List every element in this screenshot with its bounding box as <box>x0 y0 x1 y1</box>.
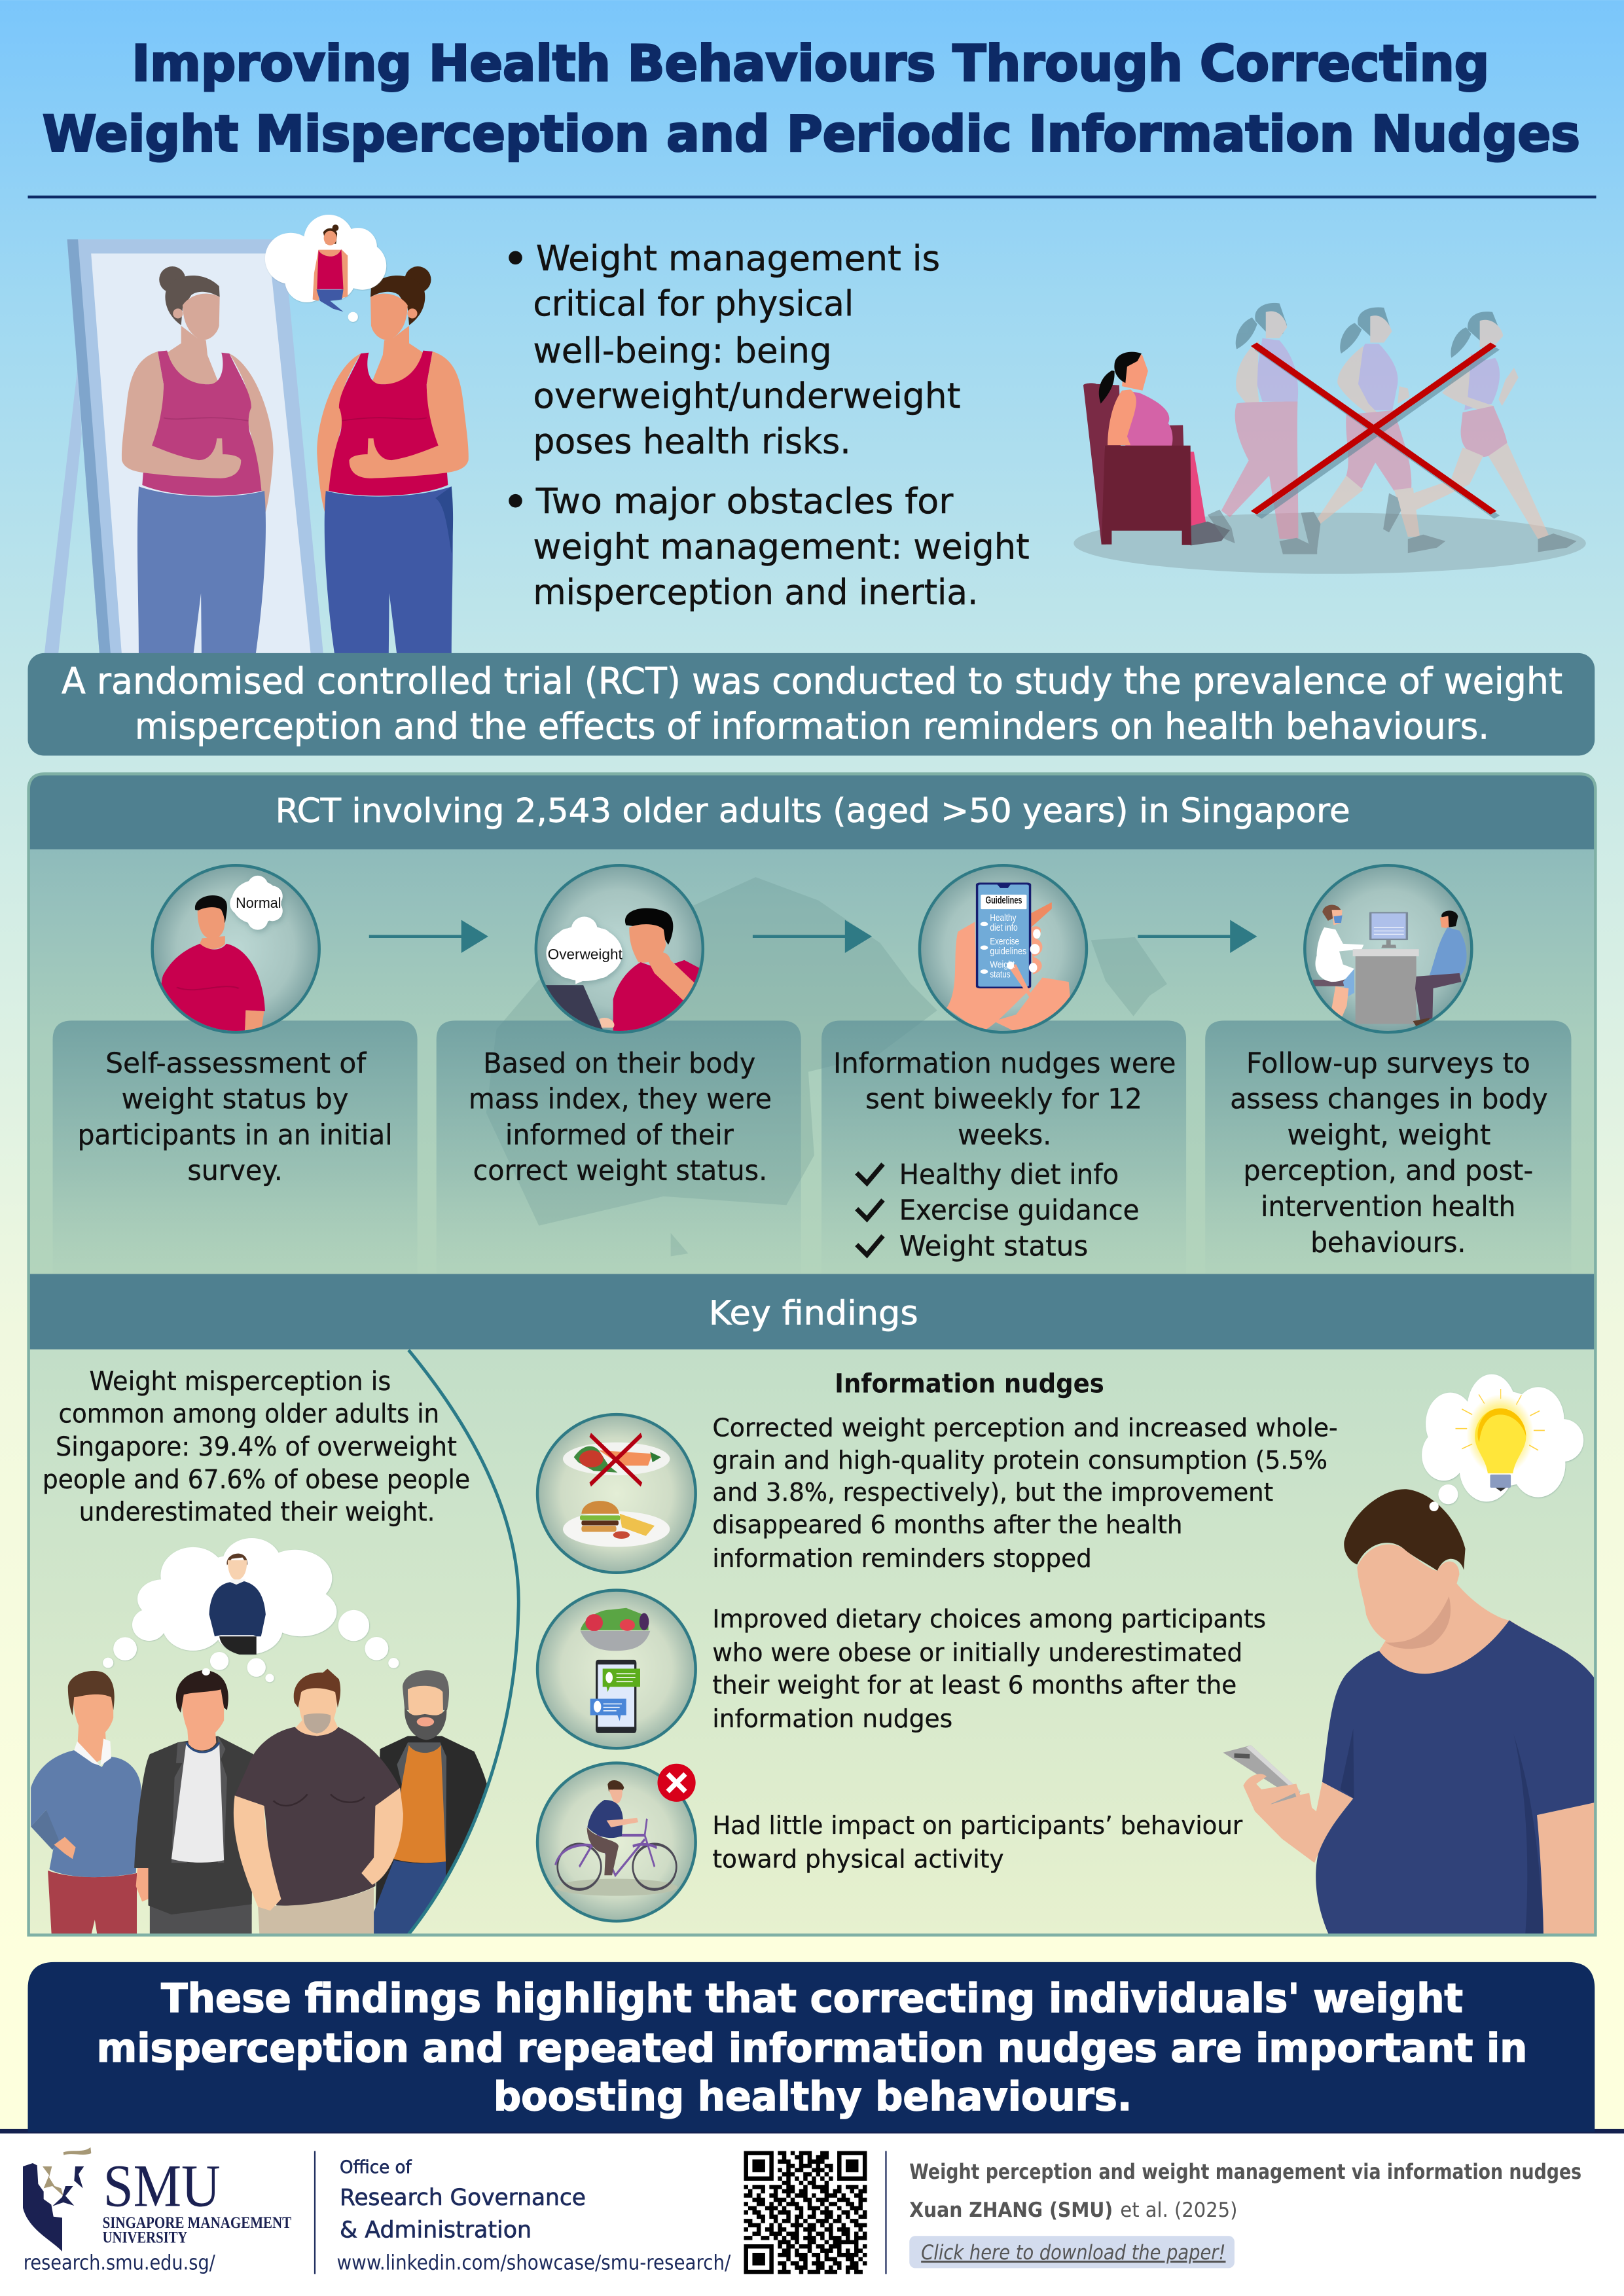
phone screen text: status <box>990 969 1011 980</box>
office name: Research Governance <box>340 2185 586 2211</box>
phone screen text <box>986 895 1026 980</box>
icon: doctor consultation <box>1305 865 1471 1032</box>
phone screen text: Guidelines <box>986 895 1022 906</box>
footer <box>0 2129 1624 2296</box>
paper authors <box>909 2198 1237 2222</box>
map of Singapore watermark <box>486 877 1167 1257</box>
bullet text <box>509 238 1030 613</box>
illustration: woman looking in mirror with thought cloud <box>44 215 469 659</box>
phone screen text: Weight <box>990 960 1015 970</box>
step 2 text: correct weight status. <box>473 1155 767 1187</box>
conclusion banner: These findings highlight that correcting individuals' weight <box>161 1976 1463 2022</box>
left finding text: Weight misperception is <box>89 1367 391 1397</box>
title <box>43 34 1580 163</box>
step 2 text: informed of their <box>505 1119 734 1151</box>
icon: hand holding phone with guidelines <box>920 865 1087 1032</box>
conclusion banner: boosting healthy behaviours. <box>494 2074 1132 2120</box>
translucent runners <box>1208 303 1577 554</box>
phone screen text: Exercise <box>990 937 1019 947</box>
seated woman in armchair <box>1083 352 1230 545</box>
nudge finding 3 text: Had little impact on participants’ behaviour <box>712 1811 1243 1840</box>
illustration: seated woman and crossed-out runners <box>1074 303 1586 574</box>
step 3 text with checklist: Information nudges were <box>833 1048 1176 1080</box>
download button: Click here to download the paper! <box>921 2241 1225 2265</box>
hair <box>1344 1489 1466 1571</box>
paper authors: et al. (2025) <box>1120 2198 1237 2222</box>
paper authors: Xuan ZHANG (SMU) <box>909 2198 1113 2222</box>
SMU logo: UNIVERSITY <box>103 2227 188 2246</box>
idea cloud <box>1422 1374 1583 1504</box>
key findings heading <box>29 1274 1595 1350</box>
step 4 text: Follow-up surveys to <box>1246 1048 1530 1080</box>
left finding text: people and 67.6% of obese people <box>43 1465 470 1495</box>
step 1 text: Self-assessment of <box>105 1048 367 1080</box>
phone <box>1223 1746 1301 1799</box>
conclusion banner <box>28 1962 1595 2132</box>
nudge finding 3 text <box>712 1811 1243 1874</box>
panel heading <box>28 773 1596 850</box>
step 3 text with checklist: weeks. <box>958 1119 1051 1151</box>
step 1 text: survey. <box>187 1155 283 1187</box>
step 3 text with checklist: Weight status <box>899 1230 1088 1263</box>
mirror reflection figure <box>122 266 273 659</box>
step 4 text: weight, weight <box>1287 1119 1490 1151</box>
nudge finding 1 text: Corrected weight perception and increased whole- <box>712 1414 1338 1443</box>
nudge finding 1 text: grain and high-quality protein consumption (5.5% <box>712 1446 1327 1475</box>
step cards <box>53 1020 1571 1274</box>
light bulb <box>1456 1389 1545 1492</box>
nudge finding 2 text: information nudges <box>712 1704 952 1733</box>
icon: cyclist with no-entry cross <box>537 1763 696 1921</box>
icon: vegetables and phone messages <box>537 1590 696 1748</box>
nudge finding 1 text: disappeared 6 months after the health <box>712 1510 1182 1539</box>
slim self-image in cloud <box>313 224 348 312</box>
SMU logo: SMU <box>103 2152 221 2219</box>
bullet one: Weight management is <box>536 238 940 279</box>
bullet one: overweight/underweight <box>533 375 961 416</box>
office name <box>340 2157 586 2243</box>
download button <box>909 2236 1235 2268</box>
bullet one: poses health risks. <box>533 420 851 461</box>
conclusion banner: misperception and repeated information nudges are important in <box>97 2026 1527 2072</box>
information nudges heading: Information nudges <box>835 1369 1104 1399</box>
step 3 text with checklist: Exercise guidance <box>899 1195 1140 1227</box>
step 1 text: weight status by <box>122 1084 348 1116</box>
step 2 text: mass index, they were <box>469 1084 772 1116</box>
title: Improving Health Behaviours Through Correcting <box>132 34 1489 92</box>
step 4 text <box>1230 1048 1548 1259</box>
step 3 text with checklist <box>833 1048 1176 1263</box>
step 4 text: assess changes in body <box>1230 1084 1548 1116</box>
speech cloud: Overweight: Overweight <box>548 946 623 962</box>
SMU logo: SINGAPORE MANAGEMENT <box>103 2213 291 2232</box>
office name: & Administration <box>340 2217 532 2243</box>
speech cloud: Overweight <box>546 917 623 984</box>
panel: RCT steps <box>28 773 1596 1274</box>
SMU research website: research.smu.edu.sg/ <box>24 2251 215 2275</box>
SMU logo <box>23 2147 291 2251</box>
step 2 text: Based on their body <box>483 1048 755 1080</box>
man 4 with beard and orange shirt <box>372 1670 490 1935</box>
phone screen text: diet info <box>990 923 1018 933</box>
man 2 with dark jacket <box>134 1668 253 1935</box>
bullet one: well-being: being <box>533 330 832 371</box>
step 2 text <box>469 1048 772 1187</box>
illustration: man with phone thinking of light bulb <box>1223 1374 1597 1935</box>
nudge finding 2 text: who were obese or initially underestimated <box>712 1638 1242 1667</box>
bullet two: weight management: weight <box>533 526 1030 567</box>
real woman figure <box>317 266 469 659</box>
icon: person on laptop told overweight <box>536 865 705 1034</box>
phone screen text: guidelines <box>990 946 1026 957</box>
thought cloud <box>103 1538 399 1682</box>
arrow <box>753 922 869 950</box>
panel border <box>29 774 1595 1935</box>
step 1 text <box>78 1048 393 1187</box>
bullet two: misperception and inertia. <box>533 571 978 613</box>
bullet two: Two major obstacles for <box>535 480 954 522</box>
shirt and arm <box>1537 1803 1597 1935</box>
man 3 heavy build <box>234 1669 403 1935</box>
step 4 text: behaviours. <box>1310 1227 1466 1259</box>
RCT banner: A randomised controlled trial (RCT) was conducted to study the prevalence of weight <box>62 660 1562 702</box>
RCT banner <box>28 653 1595 755</box>
speech cloud: Normal: Normal <box>236 895 281 911</box>
panel heading: RCT involving 2,543 older adults (aged >50 years) in Singapore <box>276 791 1350 830</box>
illustration: four men with shared thought cloud <box>31 1538 490 1935</box>
panel: key findings <box>29 1274 1595 1934</box>
QR code <box>744 2151 867 2274</box>
nudge finding 2 text: their weight for at least 6 months after the <box>712 1670 1236 1699</box>
nudge finding 1 text <box>712 1414 1338 1573</box>
nudge finding 3 text: toward physical activity <box>712 1845 1004 1874</box>
nudge finding 1 text: information reminders stopped <box>712 1544 1092 1573</box>
icon: healthy food crossed, fast food <box>537 1414 696 1573</box>
RCT banner: misperception and the effects of information reminders on health behaviours. <box>135 706 1489 747</box>
bullet one <box>509 238 961 461</box>
step 4 text: perception, and post- <box>1243 1155 1533 1187</box>
nudge finding 2 text: Improved dietary choices among participants <box>712 1605 1266 1634</box>
linkedin address: www.linkedin.com/showcase/smu-research/ <box>337 2251 731 2275</box>
bullet one: critical for physical <box>533 283 854 324</box>
icon: person thinking normal <box>153 865 319 1034</box>
arrow <box>369 922 486 950</box>
left finding text: Singapore: 39.4% of overweight <box>56 1432 457 1462</box>
step 1 text: participants in an initial <box>78 1119 393 1151</box>
step 4 text: intervention health <box>1261 1191 1515 1223</box>
arrow <box>1138 922 1254 950</box>
speech cloud: Normal <box>230 876 283 930</box>
red cross <box>1254 344 1497 517</box>
step 3 text with checklist: sent biweekly for 12 <box>865 1084 1142 1116</box>
arm and hand <box>1243 1774 1353 1863</box>
left finding text <box>43 1367 470 1527</box>
step 3 text with checklist: Healthy diet info <box>899 1159 1119 1191</box>
red cross badge <box>657 1764 696 1802</box>
nudge finding 1 text: and 3.8%, respectively), but the improvement <box>712 1478 1273 1507</box>
thought cloud <box>265 215 386 322</box>
bullet two <box>509 480 1030 613</box>
phone screen text: Healthy <box>990 913 1017 924</box>
ideal self in cloud <box>209 1554 266 1655</box>
left finding text: underestimated their weight. <box>79 1497 435 1527</box>
nudge finding 2 text <box>712 1605 1266 1733</box>
man 1 with blue sweater <box>31 1671 141 1935</box>
title: Weight Misperception and Periodic Information Nudges <box>43 105 1580 163</box>
curved divider <box>408 1350 518 1934</box>
office name: Office of <box>340 2157 412 2178</box>
left finding text: common among older adults in <box>58 1399 439 1429</box>
key findings heading: Key findings <box>709 1294 918 1333</box>
